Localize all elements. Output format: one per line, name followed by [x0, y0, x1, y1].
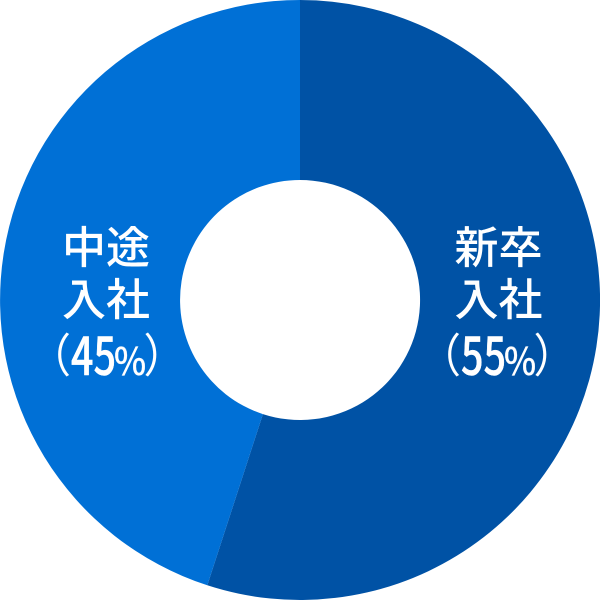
label: new graduate hires 55%: % — [504, 332, 536, 387]
label: new graduate hires 55% — [419, 224, 575, 391]
label: mid-career hires 45%: % — [114, 332, 146, 387]
segment: mid-career 45% — [0, 0, 300, 585]
label: mid-career hires 45%: 45 — [71, 315, 116, 391]
label: new graduate hires 55%: 新卒 — [454, 224, 542, 273]
segment: new graduates 55% — [207, 0, 600, 600]
label: mid-career hires 45%: 入社 — [62, 276, 150, 325]
label: new graduate hires 55%: （ — [419, 319, 461, 386]
label: mid-career hires 45% — [29, 224, 185, 391]
label: mid-career hires 45%: （ — [29, 319, 71, 386]
label: mid-career hires 45%: 中途 — [62, 224, 150, 273]
label: new graduate hires 55%: ） — [534, 319, 575, 386]
label: new graduate hires 55%: 55 — [461, 315, 506, 391]
label: mid-career hires 45%: ） — [144, 319, 185, 386]
label: new graduate hires 55%: 入社 — [454, 276, 542, 325]
